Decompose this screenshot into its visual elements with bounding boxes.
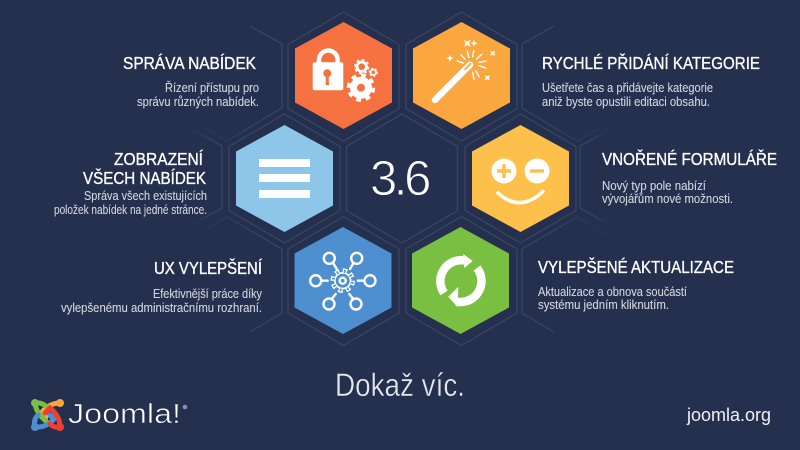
icon: Joomla logo mark xyxy=(31,399,64,431)
panel: quick add category hexagon xyxy=(413,22,510,129)
text block: Správa nabídek: Řízení přístupu pro xyxy=(165,80,259,95)
text block: Vylepšené aktualizace: Aktualizace a obnova součástí xyxy=(538,285,687,299)
icon: gear network xyxy=(310,253,376,310)
text block: Rychlé přidání kategorie: aniž byste opustili editaci obsahu. xyxy=(542,95,710,109)
text block: UX vylepšení: UX VYLEPŠENÍ xyxy=(154,257,262,278)
text block: Správa nabídek: SPRÁVA NABÍDEK xyxy=(123,53,256,73)
panel: improved updates hexagon xyxy=(412,227,509,334)
text block: Rychlé přidání kategorie: Ušetřete čas a přidávejte kategorie xyxy=(542,81,713,95)
text block: Zobrazení všech nabídek: VŠECH NABÍDEK xyxy=(83,167,206,188)
icon: menu bars xyxy=(259,159,310,198)
text block: UX vylepšení: vylepšenému administračnímu rozhraní. xyxy=(61,301,262,315)
panel: all menus view hexagon xyxy=(236,125,333,232)
website url: joomla.org xyxy=(686,404,771,425)
text block: Vylepšené aktualizace xyxy=(538,256,734,312)
icon: padlock with gears xyxy=(313,50,377,100)
text block: Zobrazení všech nabídek xyxy=(54,149,207,217)
slogan: Dokaž víc. xyxy=(335,367,465,403)
text block: Rychlé přidání kategorie: RYCHLÉ PŘIDÁNÍ KATEGORIE xyxy=(542,53,760,73)
text block: Vylepšené aktualizace: systému jedním kliknutím. xyxy=(538,298,669,312)
text block: Vnořené formuláře xyxy=(602,149,777,206)
text block: Vnořené formuláře: VNOŘENÉ FORMULÁŘE xyxy=(602,149,777,169)
text block: UX vylepšení: Efektivnější práce díky xyxy=(153,287,263,301)
text block: Zobrazení všech nabídek: položek nabídek na jedné stránce. xyxy=(54,203,207,217)
text block: Vylepšené aktualizace: VYLEPŠENÉ AKTUALIZACE xyxy=(538,256,734,277)
panel: nested forms hexagon xyxy=(472,125,569,232)
panel: access management hexagon xyxy=(295,22,392,129)
text block: Zobrazení všech nabídek: Správa všech existujících xyxy=(84,189,207,203)
text block: Zobrazení všech nabídek: ZOBRAZENÍ xyxy=(114,149,203,169)
icon: magic wand xyxy=(435,40,495,100)
panel: UX improvements hexagon xyxy=(294,227,392,334)
icon: plus minus smiley xyxy=(492,158,550,203)
text block: Správa nabídek xyxy=(123,53,259,109)
text block: UX vylepšení xyxy=(61,257,263,315)
text block: Vnořené formuláře: Nový typ pole nabízí xyxy=(602,179,706,193)
icon: refresh arrows xyxy=(440,254,481,307)
text block: Správa nabídek: správu různých nabídek. xyxy=(137,95,259,109)
version number 3.6: 3.6 xyxy=(370,152,431,206)
text block: Rychlé přidání kategorie xyxy=(542,53,760,109)
Joomla wordmark: Joomla! xyxy=(68,398,181,429)
text block: Vnořené formuláře: vývojářům nové možnosti. xyxy=(602,192,733,206)
